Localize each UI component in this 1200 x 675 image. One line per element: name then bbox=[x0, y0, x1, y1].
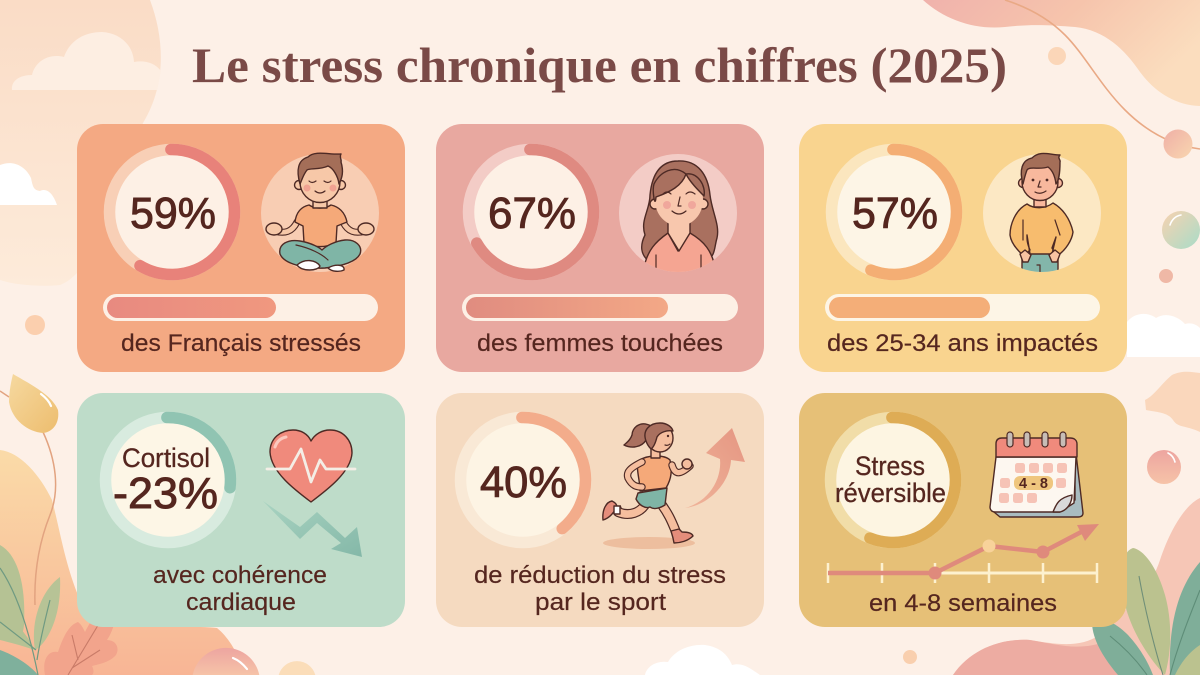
background decoration: top left blob and clouds bbox=[0, 0, 161, 335]
icon: smiling woman bbox=[619, 154, 737, 275]
icon: pink bubble bbox=[193, 648, 259, 675]
icon: standing young man bbox=[983, 153, 1101, 280]
ring: 67% bbox=[467, 148, 595, 276]
icon: yellow bud bbox=[9, 374, 58, 433]
label: des 25-34 ans impactés bbox=[827, 330, 1098, 357]
icon: oak leaf bbox=[44, 605, 118, 675]
icon: heart with pulse bbox=[267, 430, 355, 502]
panel: 59% des Français stressés bbox=[77, 124, 405, 372]
timeline chart bbox=[828, 524, 1099, 583]
icon: meditating person bbox=[261, 153, 379, 272]
stat: 59%: 59% bbox=[130, 189, 216, 238]
stat: Stress réversible: Stress bbox=[855, 451, 925, 481]
background decoration: bottom left blob and plants bbox=[0, 374, 315, 675]
progress bar: 59% bbox=[103, 294, 378, 321]
panel: 57% des 25-34 ans impactés bbox=[799, 124, 1127, 372]
ring: cortisol bbox=[104, 416, 232, 544]
stat: 67%: 67% bbox=[488, 189, 576, 238]
stat: Stress réversible: réversible bbox=[835, 478, 946, 508]
background decoration: bottom right blobs, cloud, plants bbox=[903, 372, 1200, 675]
label: avec cohérence bbox=[153, 562, 327, 589]
progress bar: 67% bbox=[462, 294, 738, 321]
ring: 40% bbox=[459, 416, 587, 544]
label: cardiaque bbox=[186, 589, 296, 616]
progress bar: 57% bbox=[825, 294, 1100, 321]
panel: 67% des femmes touchées bbox=[436, 124, 764, 372]
stat: Cortisol -23%: -23% bbox=[113, 469, 218, 518]
label: par le sport bbox=[535, 589, 666, 616]
ring: reversible bbox=[829, 416, 957, 544]
stat: Cortisol -23% bbox=[113, 443, 218, 518]
stat: 57%: 57% bbox=[852, 189, 938, 238]
label bbox=[153, 562, 327, 616]
icon: running woman bbox=[603, 423, 695, 549]
ring: 57% bbox=[830, 148, 958, 276]
icon: calendar 4-8: 4 - 8 bbox=[1019, 476, 1048, 492]
label: de réduction du stress bbox=[474, 562, 726, 589]
ring: 59% bbox=[108, 148, 236, 276]
label: des femmes touchées bbox=[477, 330, 723, 357]
stat: Stress réversible bbox=[835, 451, 946, 508]
title: Le stress chronique en chiffres (2025) bbox=[192, 37, 1007, 93]
arrow: trending up bbox=[685, 428, 745, 508]
icon: calendar 4-8 bbox=[990, 432, 1083, 517]
background decoration: bottom centre cloud bbox=[645, 645, 760, 675]
arrow: trending down bbox=[263, 501, 362, 557]
panel: Stress réversible bbox=[799, 393, 1127, 627]
label: en 4-8 semaines bbox=[869, 590, 1057, 617]
label: des Français stressés bbox=[121, 330, 361, 357]
stat: 40%: 40% bbox=[480, 458, 567, 507]
small bubble bbox=[279, 661, 315, 675]
panel: Cortisol -23% bbox=[77, 393, 405, 627]
label bbox=[474, 562, 726, 616]
background decoration: top right blob, line, bubbles bbox=[923, 0, 1200, 357]
panel: 40% de réduction du stress bbox=[436, 393, 764, 627]
stat: Cortisol -23%: Cortisol bbox=[122, 443, 210, 473]
